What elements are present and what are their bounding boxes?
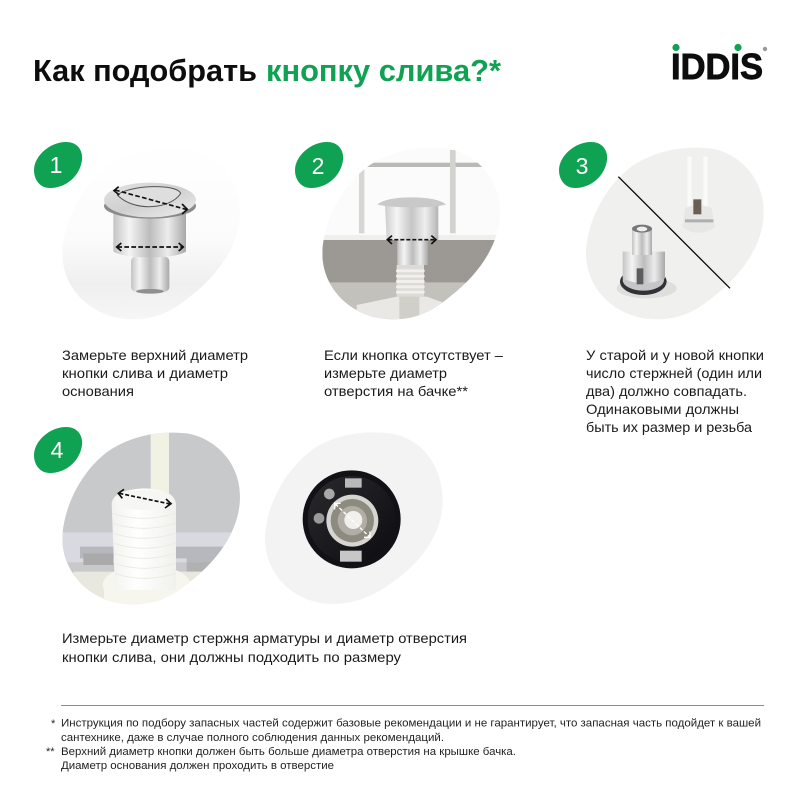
footnotes: * bbox=[51, 718, 56, 730]
badge: 2: 2 bbox=[312, 153, 324, 179]
text: step 3: Одинаковыми должны bbox=[586, 401, 739, 417]
text: step 4: Измерьте диаметр стержня арматуры и диаметр отверстия bbox=[62, 630, 467, 646]
text: step 2: измерьте диаметр bbox=[324, 365, 447, 381]
text: step 3: быть их размер и резьба bbox=[586, 419, 752, 435]
text: step 1: кнопки слива и диаметр bbox=[62, 365, 228, 381]
footnotes bbox=[46, 718, 761, 772]
photo: flush button with two diameters bbox=[62, 182, 226, 319]
title: кнопку слива?* bbox=[266, 53, 502, 88]
title bbox=[33, 53, 502, 88]
photo: old and new button parts bbox=[586, 148, 764, 320]
text: step 3: число стержней (один или bbox=[586, 365, 762, 381]
footnotes: Инструкция по подбору запасных частей содержит базовые рекомендации и не гарантирует, что запасная часть подойдет к вашей bbox=[61, 718, 761, 730]
text: step 3 bbox=[586, 347, 764, 435]
text: step 1: основания bbox=[62, 383, 134, 399]
badge: 1: 1 bbox=[50, 152, 62, 178]
badge: 3: 3 bbox=[576, 153, 588, 179]
panel: step 1 bbox=[34, 142, 248, 396]
badge: 2 bbox=[295, 142, 343, 188]
title: Как подобрать bbox=[33, 53, 257, 88]
panel: step 3 bbox=[559, 142, 764, 435]
text: step 3: два) должно совпадать. bbox=[586, 383, 747, 399]
photo: button underside with hole bbox=[265, 432, 442, 604]
text: step 2: Если кнопка отсутствует – bbox=[324, 347, 503, 363]
text: step 3: У старой и у новой кнопки bbox=[586, 347, 764, 363]
footnotes: Диаметр основания должен проходить в отверстие bbox=[61, 760, 334, 772]
badge: 4 bbox=[34, 427, 82, 473]
panel: step 2 bbox=[295, 142, 503, 399]
text: step 1 bbox=[62, 347, 248, 399]
photo: threaded fitting rod bbox=[62, 432, 240, 604]
badge: 4: 4 bbox=[51, 437, 64, 463]
badge: 1 bbox=[34, 142, 82, 188]
text: step 4: кнопки слива, они должны подходить по размеру bbox=[62, 649, 401, 665]
footnotes: ** bbox=[46, 746, 55, 758]
panel: step 4 bbox=[30, 425, 467, 665]
photo: tank opening with diameter bbox=[322, 150, 496, 320]
text: step 4 bbox=[62, 630, 467, 665]
badge: 3 bbox=[559, 142, 607, 188]
footnotes: Верхний диаметр кнопки должен быть больше диаметра отверстия на крышке бачка. bbox=[61, 746, 516, 758]
logo: IDDIS: IDDIS bbox=[671, 46, 763, 87]
text: step 2 bbox=[324, 347, 503, 399]
text: step 1: Замерьте верхний диаметр bbox=[62, 347, 248, 363]
text: step 2: отверстия на бачке** bbox=[324, 383, 469, 399]
footnotes: сантехнике, даже в случае полного соблюдения данных рекомендаций. bbox=[61, 732, 444, 744]
